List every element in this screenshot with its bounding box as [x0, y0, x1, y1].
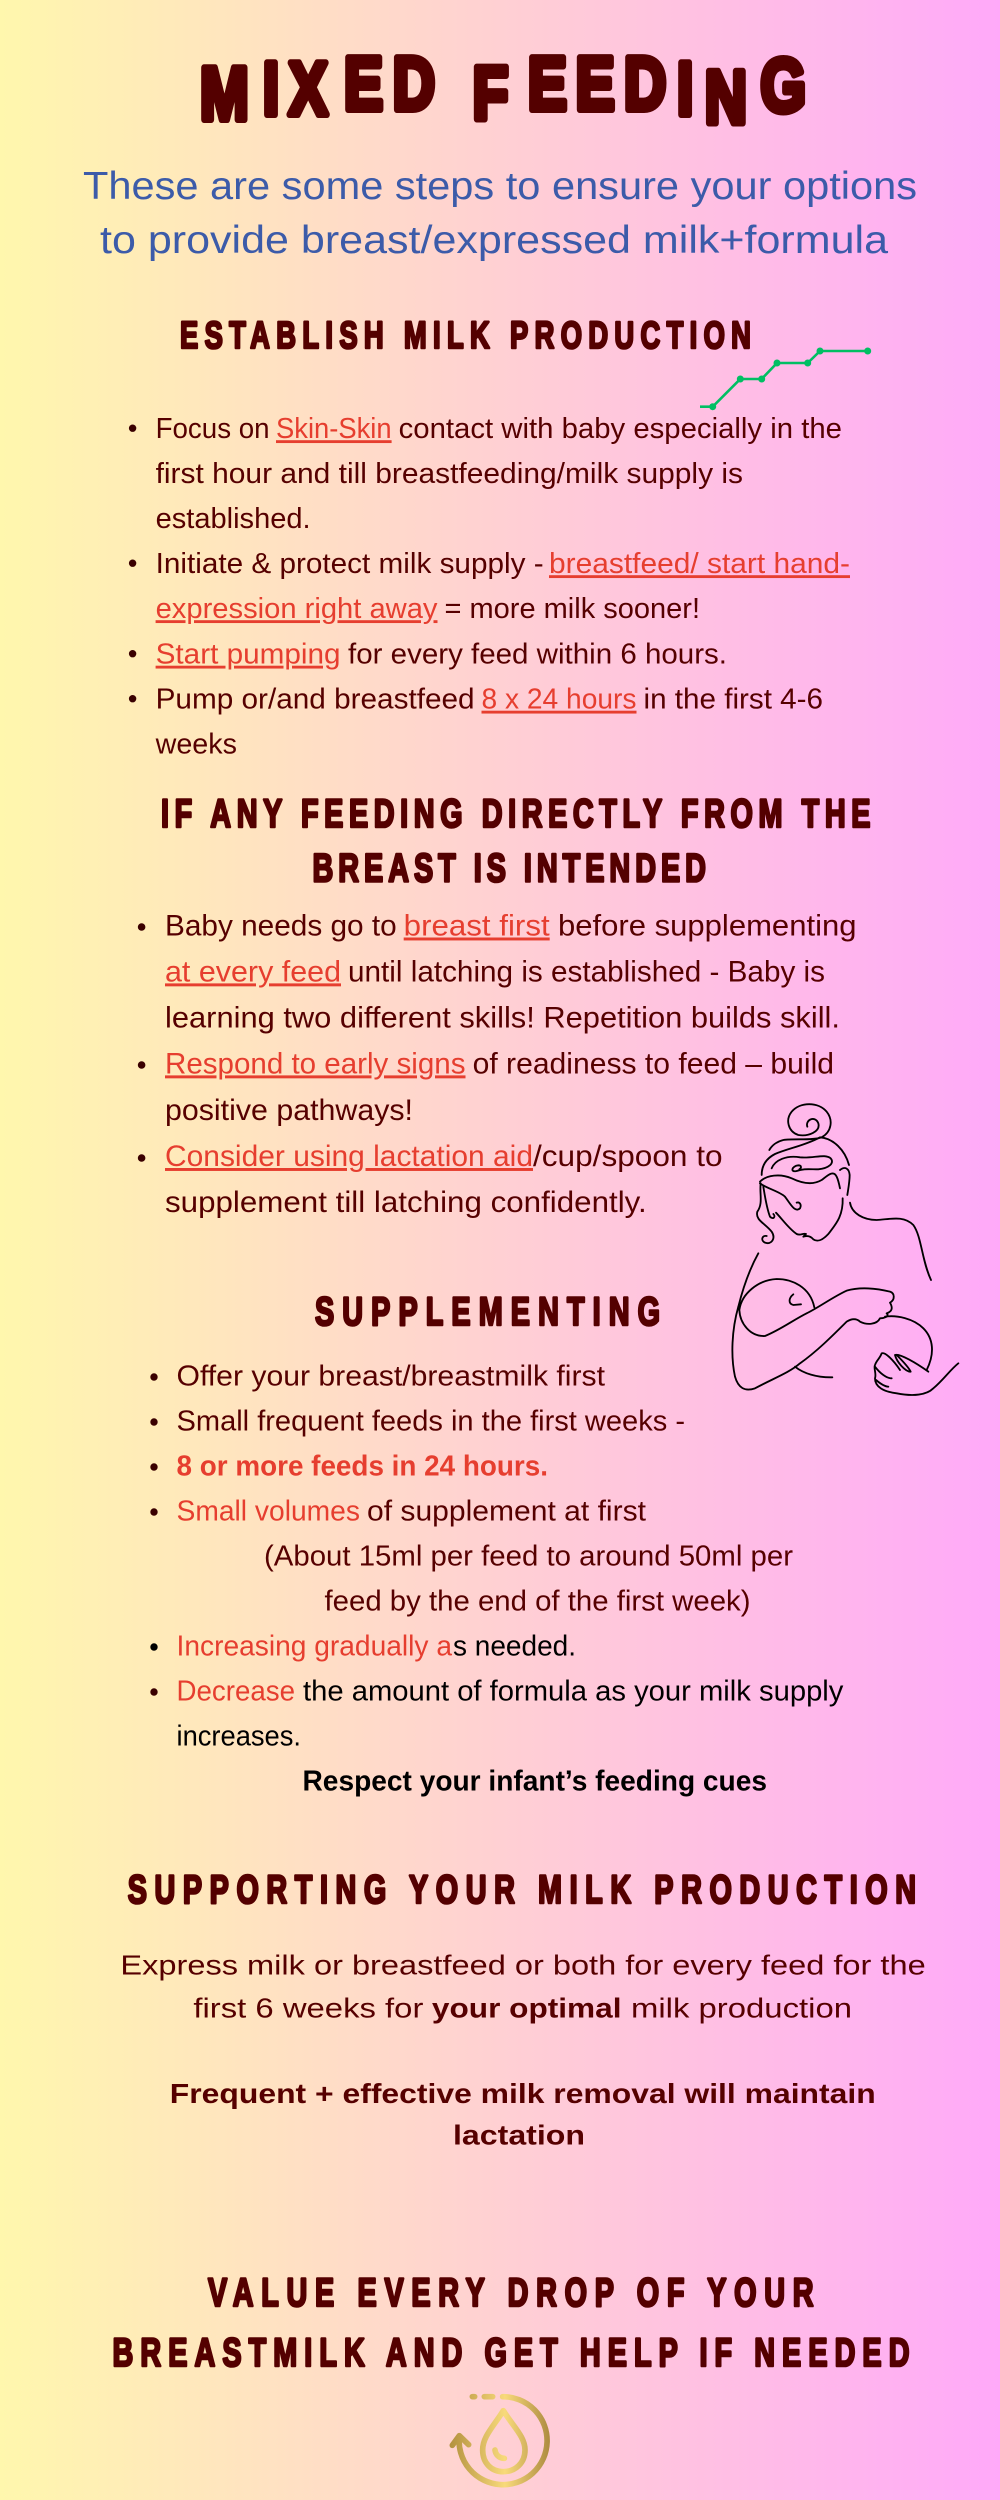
- subtitle: to provide breast/expressed milk+formula: [100, 219, 888, 262]
- bullet list: establish milk production: breastfeed/ start hand-: [549, 548, 850, 580]
- icon: green rising line: [700, 348, 871, 410]
- bullet list: supplementing: (About 15ml per feed to around 50ml per: [264, 1540, 794, 1572]
- text block: frequent milk removal: lactation: [453, 2120, 585, 2151]
- bullet list: supplementing: feed by the end of the first week): [324, 1585, 750, 1617]
- bullet list: supplementing: the amount of formula as your milk supply: [303, 1676, 844, 1708]
- bullet list: establish milk production: first hour and till breastfeeding/milk supply is: [156, 458, 743, 490]
- text block: express milk: your optimal: [432, 1993, 622, 2024]
- bullet list: feeding directly from the breast: /cup/spoon to: [533, 1140, 723, 1173]
- bullet list: supplementing: increases.: [176, 1720, 301, 1752]
- panel: supporting your milk production: [120, 1867, 926, 2151]
- bullet list: supplementing: Offer your breast/breastmilk first: [176, 1360, 605, 1392]
- bullet list: feeding directly from the breast: breast first: [404, 910, 550, 942]
- bullet list: feeding directly from the breast: positive pathways!: [165, 1094, 413, 1127]
- bullet list: establish milk production: Pump or/and breastfeed: [156, 684, 475, 716]
- text block: express milk: [120, 1950, 926, 2024]
- text block: express milk: first 6 weeks for: [193, 1993, 423, 2024]
- bullet list: establish milk production: Initiate & protect milk supply -: [156, 548, 544, 580]
- closing heading: BREASTMILK AND GET HELP IF NEEDED: [113, 2330, 910, 2375]
- heading: establish milk production: ESTABLISH MILK PRODUCTION: [180, 315, 751, 357]
- callout: respect feeding cues: Respect your infant’s feeding cues: [302, 1765, 767, 1797]
- illustration: mother nursing baby: [732, 1104, 958, 1395]
- text block: express milk: milk production: [631, 1993, 852, 2024]
- bullet list: establish milk production: in the first 4-6: [644, 684, 823, 716]
- bullet list: establish milk production: Skin-Skin: [276, 413, 392, 445]
- bullet list: supplementing: of supplement at first: [367, 1495, 646, 1527]
- bullet list: supplementing: 8 or more feeds in 24 hours.: [176, 1450, 548, 1482]
- bullet list: supplementing: Small volumes: [176, 1495, 360, 1527]
- bullet list: establish milk production: Start pumping: [156, 639, 341, 671]
- closing heading: [113, 2270, 910, 2375]
- bullet list: supplementing: s needed.: [453, 1631, 576, 1663]
- bullet list: feeding directly from the breast: Consider using lactation aid: [165, 1140, 533, 1173]
- bullet list: supplementing: Small frequent feeds in the first weeks -: [176, 1405, 685, 1437]
- bullet list: establish milk production: weeks: [155, 729, 237, 761]
- bullet list: establish milk production: expression right away: [156, 593, 438, 625]
- bullet list: establish milk production: [129, 413, 850, 761]
- panel: feeding directly from the breast: [138, 791, 870, 1219]
- bullet list: feeding directly from the breast: at every feed: [165, 955, 341, 988]
- bullet list: establish milk production: established.: [156, 503, 311, 535]
- bullet list: feeding directly from the breast: [138, 910, 857, 1219]
- bullet list: feeding directly from the breast: before supplementing: [558, 910, 856, 942]
- text block: frequent milk removal: Frequent + effective milk removal will maintain: [170, 2078, 876, 2109]
- bullet list: supplementing: [150, 1360, 844, 1752]
- bullet list: feeding directly from the breast: until latching is established - Baby is: [348, 955, 825, 988]
- heading: if any feeding directly from the breast: BREAST IS INTENDED: [312, 846, 706, 891]
- closing heading: VALUE EVERY DROP OF YOUR: [208, 2270, 814, 2315]
- text block: frequent milk removal: [170, 2078, 876, 2151]
- bullet list: feeding directly from the breast: learning two different skills! Repetition builds skill.: [165, 1001, 840, 1034]
- bullet list: establish milk production: for every feed within 6 hours.: [348, 639, 727, 671]
- subtitle: [83, 165, 917, 262]
- heading: supporting your milk production: SUPPORTING YOUR MILK PRODUCTION: [128, 1867, 916, 1912]
- bullet list: feeding directly from the breast: supplement till latching confidently.: [165, 1186, 647, 1219]
- icon: gold milk drop logo: [452, 2397, 547, 2485]
- bullet list: feeding directly from the breast: Baby needs go to: [165, 910, 397, 942]
- title: MIXED FEEDING: [200, 43, 806, 140]
- bullet list: establish milk production: = more milk sooner!: [444, 593, 700, 625]
- subtitle: These are some steps to ensure your options: [83, 165, 917, 208]
- bullet list: feeding directly from the breast: Respond to early signs: [165, 1047, 466, 1080]
- heading: if any feeding directly from the breast: [161, 791, 870, 891]
- bullet list: establish milk production: 8 x 24 hours: [482, 684, 636, 716]
- panel: establish milk production: [129, 315, 871, 761]
- bullet list: feeding directly from the breast: of readiness to feed – build: [473, 1047, 834, 1080]
- bullet list: supplementing: Increasing gradually a: [176, 1631, 452, 1663]
- text block: express milk: Express milk or breastfeed or both for every feed for the: [120, 1950, 926, 1981]
- heading: supplementing: SUPPLEMENTING: [315, 1289, 660, 1334]
- heading: if any feeding directly from the breast: IF ANY FEEDING DIRECTLY FROM THE: [161, 791, 870, 836]
- panel: supplementing: [150, 1289, 844, 1797]
- bullet list: establish milk production: contact with baby especially in the: [399, 413, 842, 445]
- bullet list: establish milk production: Focus on: [156, 413, 270, 445]
- bullet list: supplementing: Decrease: [176, 1676, 295, 1708]
